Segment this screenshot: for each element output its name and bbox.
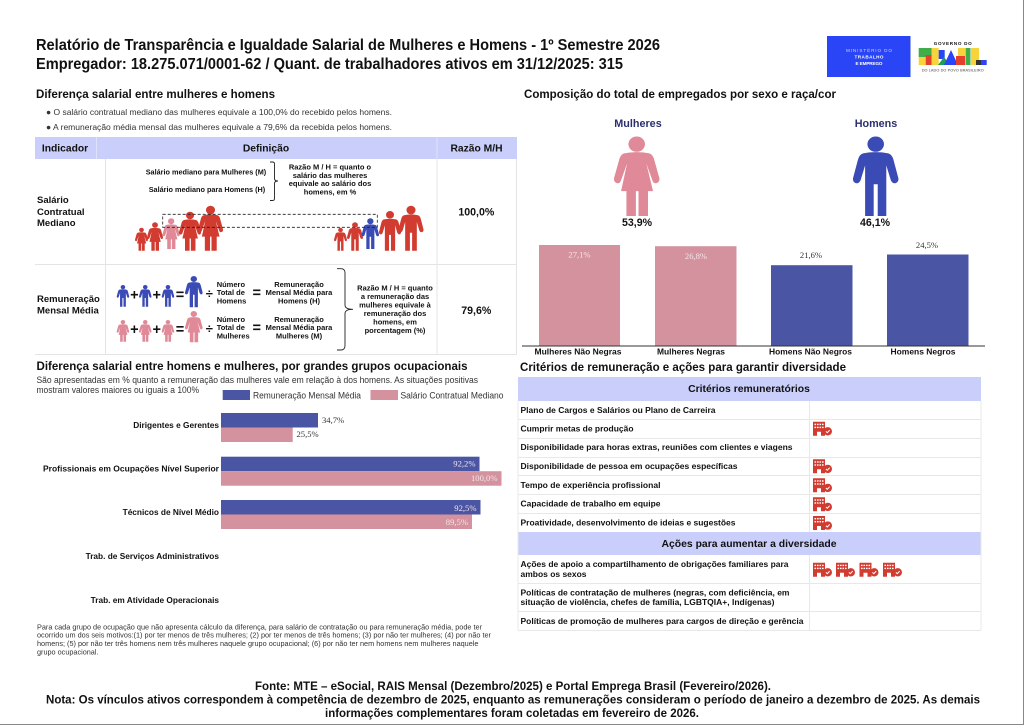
footnote: homens; (5) por não ter três homens nem três mulheres naquele grupo ocupacional; (6) por não ter nem homens nem mulheres naquele xyxy=(37,639,478,648)
formula: mulheres: = xyxy=(252,320,261,336)
text block: explicação xyxy=(36,375,479,395)
row: políticas de contratação xyxy=(520,587,790,607)
text block: explicação: São apresentadas em % quanto a remuneração das mulheres vale em relação à dos homens. As situações positivas xyxy=(36,375,479,385)
footnote xyxy=(37,622,491,657)
row: políticas de contratação: Políticas de contratação de mulheres (negras, com deficiência, em xyxy=(520,587,790,597)
group: atividade operacional: Trab. em Atividade Operacionais xyxy=(91,595,219,605)
value: 79,6%: 79,6% xyxy=(461,305,492,317)
group: técnicos nível médio: 92,5% xyxy=(454,503,476,513)
formula: mulheres: Número xyxy=(217,315,245,324)
header: ações para diversidade: Ações para aumentar a diversidade xyxy=(662,539,837,550)
row: metas de produção: Cumprir metas de produção xyxy=(520,424,634,434)
definition text: salário mediano: Salário mediano para Homens (H) xyxy=(149,185,266,194)
source and note: Fonte: MTE – eSocial, RAIS Mensal (Dezembro/2025) e Portal Emprega Brasil (Fevereiro/2026). xyxy=(255,679,771,693)
formula: mulheres: ÷ xyxy=(206,321,213,336)
logo: governo do brasil xyxy=(919,41,987,72)
group: profissionais nível superior: 92,2% xyxy=(453,459,476,469)
figure: homens xyxy=(853,118,898,229)
category labels: Homens Não Negros xyxy=(769,347,853,356)
category labels: Homens Negros xyxy=(890,347,956,356)
legend xyxy=(223,390,504,400)
category labels xyxy=(534,347,956,356)
row label: salário contratual mediano: Contratual xyxy=(37,207,84,218)
figure: mulheres: Mulheres xyxy=(614,118,662,130)
formula: mulheres: Mulheres xyxy=(217,332,250,341)
figure: homens: Homens xyxy=(855,118,897,130)
row: obrigações familiares xyxy=(520,559,902,579)
row: trabalho em equipe: Capacidade de trabalho em equipe xyxy=(520,498,661,508)
formula: homens: + xyxy=(152,288,161,304)
formula: homens: Remuneração xyxy=(274,280,324,289)
category labels: Mulheres Não Negras xyxy=(534,347,622,356)
large brace xyxy=(337,269,353,350)
bar: mulheres não negras: 27,1% xyxy=(568,250,591,260)
row: trabalho em equipe xyxy=(520,497,832,511)
formula: mulheres: Total de xyxy=(217,323,245,332)
bar: mulheres não negras xyxy=(539,245,620,346)
definition text: razão salário: salário das mulheres xyxy=(293,171,367,180)
definition text: razão remuneração: Razão M / H = quanto xyxy=(357,284,433,293)
bar chart: grupos ocupacionais xyxy=(43,413,502,605)
definition text: razão remuneração: mulheres equivale à xyxy=(359,300,432,310)
formula: homens: ÷ xyxy=(206,286,213,301)
header: critérios remuneratórios: Critérios remuneratórios xyxy=(688,384,810,395)
formula: mulheres: Remuneração xyxy=(274,315,324,324)
formula: homens: Mensal Média para xyxy=(266,288,333,297)
row: políticas de promoção: Políticas de promoção de mulheres para cargos de direção e gerência xyxy=(520,616,804,626)
group: dirigentes e gerentes: 34,7% xyxy=(322,415,344,425)
group: dirigentes e gerentes xyxy=(133,413,344,442)
row: proatividade xyxy=(520,516,832,530)
icon group: mulheres por salário xyxy=(135,206,223,251)
category labels: Mulheres Negras xyxy=(657,347,726,356)
icon group: homens por salário xyxy=(334,206,424,251)
heading: diferença por grupos ocupacionais: Diferença salarial entre homens e mulheres, por grandes grupos ocupacionais xyxy=(36,360,468,373)
row label: salário contratual mediano: Mediano xyxy=(37,218,76,229)
group: profissionais nível superior xyxy=(43,457,502,486)
formula: homens: = xyxy=(176,288,184,304)
definition text: razão remuneração: a remuneração das xyxy=(361,292,429,301)
logo: ministério do trabalho e emprego: MINISTÉRIO DO xyxy=(846,47,892,53)
row label: salário contratual mediano xyxy=(37,195,84,229)
formula: mulheres: Mensal Média para xyxy=(266,323,333,332)
group: serviços administrativos: Trab. de Serviços Administrativos xyxy=(86,551,219,561)
heading: composição: Composição do total de empregados por sexo e raça/cor xyxy=(524,88,836,101)
definition text: razão remuneração: porcentagem (%) xyxy=(365,326,426,335)
formula: mulheres: + xyxy=(152,322,161,338)
figure: mulheres xyxy=(614,118,662,229)
group: técnicos nível médio xyxy=(123,500,480,529)
definition text: razão remuneração xyxy=(357,284,433,335)
formula: homens: Número xyxy=(217,280,245,289)
heading: diferença salarial: Diferença salarial entre mulheres e homens xyxy=(36,88,275,101)
formula: mulheres: + xyxy=(130,322,139,338)
definition text: razão remuneração: remuneração dos xyxy=(364,309,426,318)
definition text: salário mediano: Salário mediano para Mulheres (M) xyxy=(146,167,267,176)
definition text: razão salário: Razão M / H = quanto o xyxy=(289,162,372,172)
group: técnicos nível médio: Técnicos de Nível Médio xyxy=(123,507,219,517)
text block: resumo xyxy=(46,107,392,132)
row: metas de produção xyxy=(520,422,832,436)
formula: homens: Total de xyxy=(217,288,245,297)
row: obrigações familiares: ambos os sexos xyxy=(520,569,587,579)
text block: resumo: ● O salário contratual mediano das mulheres equivale a 100,0% do recebido pelos homens. xyxy=(46,107,392,117)
bar: homens não negros: 21,6% xyxy=(800,250,822,260)
group: dirigentes e gerentes: Dirigentes e Gerentes xyxy=(133,420,219,430)
group: profissionais nível superior: 100,0% xyxy=(471,473,498,483)
bar chart: composição por raça/cor xyxy=(522,240,985,356)
formula: homens: + xyxy=(130,288,139,304)
logo: ministério do trabalho e emprego xyxy=(827,36,910,77)
row label: remuneração mensal média: Mensal Média xyxy=(37,306,99,316)
brace xyxy=(270,162,278,200)
formula: mulheres xyxy=(117,311,333,342)
legend: Remuneração Mensal Média xyxy=(253,390,361,400)
legend: Salário Contratual Mediano xyxy=(400,390,504,400)
row: plano de cargos: Plano de Cargos e Salários ou Plano de Carreira xyxy=(520,405,716,415)
definition text: salário mediano xyxy=(146,167,267,194)
formula: homens: = xyxy=(252,286,261,302)
formula: homens: Homens xyxy=(217,296,246,306)
bar: homens não negros xyxy=(771,250,852,346)
group: profissionais nível superior: Profissionais em Ocupações Nível Superior xyxy=(43,464,220,474)
figure: homens: 46,1% xyxy=(860,217,891,229)
row: políticas de contratação: situação de violência, chefes de família, LGBTQIA+, Indígenas) xyxy=(520,597,775,607)
dashed connector xyxy=(163,214,377,227)
formula: homens: Homens (H) xyxy=(278,296,321,306)
row: proatividade: Proatividade, desenvolvimento de ideias e sugestões xyxy=(520,517,736,527)
definition text: razão salário xyxy=(289,162,372,196)
row: ocupações específicas xyxy=(520,459,832,473)
logo: governo do brasil: GOVERNO DO xyxy=(934,41,972,46)
formula: mulheres: = xyxy=(176,322,184,338)
group: técnicos nível médio: 89,5% xyxy=(446,517,468,527)
formula: homens xyxy=(117,276,333,307)
row: tempo de experiência: Tempo de experiência profissional xyxy=(520,480,660,490)
bar: mulheres negras: 26,8% xyxy=(685,251,707,261)
definition text: razão remuneração: homens, em xyxy=(373,317,417,326)
text block: explicação: mostram valores maiores ou iguais a 100% xyxy=(36,385,199,395)
source and note: informações complementares foram coletadas em fevereiro de 2026. xyxy=(325,706,699,720)
title: Empregador: 18.275.071/0001-62 / Quant. de trabalhadores ativos em 31/12/2025: 315 xyxy=(36,56,623,73)
row label: salário contratual mediano: Salário xyxy=(37,195,69,206)
axis xyxy=(522,345,985,347)
source and note xyxy=(46,679,980,720)
table header: Indicador xyxy=(42,144,88,154)
bar: homens negros: 24,5% xyxy=(916,240,938,250)
row label: remuneração mensal média: Remuneração xyxy=(37,294,100,305)
definition text: razão salário: homens, em % xyxy=(304,187,357,196)
logo: ministério do trabalho e emprego: TRABALHO xyxy=(854,55,884,60)
footnote: Para cada grupo de ocupação que não apresenta cálculo da diferença, para salário de contratação ou para remuneração média, pode ter xyxy=(37,622,482,631)
logo: ministério do trabalho e emprego: E EMPREGO xyxy=(856,61,883,66)
group: dirigentes e gerentes: 25,5% xyxy=(296,429,319,439)
value: 100,0%: 100,0% xyxy=(458,207,495,219)
table header xyxy=(42,144,503,154)
panel: tabela de indicadores xyxy=(35,137,517,354)
bar: homens negros xyxy=(887,240,968,346)
footnote: grupo ocupacional. xyxy=(37,648,98,657)
row: ocupações específicas: Disponibilidade de pessoa em ocupações específicas xyxy=(520,461,738,471)
formula: mulheres: Mulheres (M) xyxy=(276,332,323,341)
row label: remuneração mensal média xyxy=(37,294,100,316)
table header: Definição xyxy=(243,144,289,154)
row: horas extras: Disponibilidade para horas extras, reuniões com clientes e viagens xyxy=(520,442,793,452)
heading: critérios: Critérios de remuneração e ações para garantir diversidade xyxy=(520,361,847,374)
title: Relatório de Transparência e Igualdade Salarial de Mulheres e Homens - 1º Semestre 2026 xyxy=(36,37,660,54)
title xyxy=(36,37,660,73)
row: tempo de experiência xyxy=(520,478,832,492)
text block: resumo: ● A remuneração média mensal das mulheres equivale a 79,6% da recebida pelos homens. xyxy=(46,122,392,132)
logo: governo do brasil: DO LADO DO POVO BRASILEIRO xyxy=(922,68,984,72)
bar: mulheres negras xyxy=(655,246,736,346)
footnote: ocorrido um dos seis motivos:(1) por ter menos de três mulheres; (2) por ter menos de três homens; (3) por não ter mulheres; (4) por não ter xyxy=(37,631,491,640)
figure: mulheres: 53,9% xyxy=(622,217,653,229)
panel: critérios e ações xyxy=(518,377,981,630)
row: obrigações familiares: Ações de apoio a compartilhamento de obrigações familiares para xyxy=(520,559,789,569)
source and note: Nota: Os vínculos ativos correspondem à competência de dezembro de 2025, enquanto as remunerações consideram o período de janeiro a dezembro de 2025. As demais xyxy=(46,692,980,706)
table header: Razão M/H xyxy=(450,144,503,154)
definition text: razão salário: equivale ao salário dos xyxy=(289,179,371,188)
